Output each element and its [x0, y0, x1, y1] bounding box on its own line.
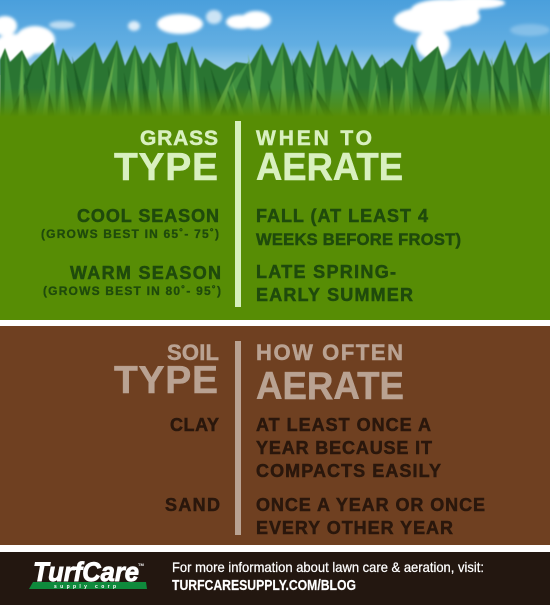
soil frequency text: YEAR BECAUSE IT — [256, 438, 432, 458]
grass timing text: LATE SPRING- — [256, 262, 396, 282]
heading: when to aerate — [256, 127, 403, 189]
soil labels: CLAY — [170, 415, 219, 435]
white gap above footer — [0, 545, 550, 552]
soil frequency text: EVERY OTHER YEAR — [256, 518, 453, 538]
footer call to action: For more information about lawn care & aeration, visit: — [172, 559, 484, 575]
soil labels: SAND — [165, 495, 220, 515]
logo: TurfCare: TM — [138, 562, 144, 567]
soil frequency text: COMPACTS EASILY — [256, 461, 441, 481]
soil frequency text: AT LEAST ONCE A — [256, 415, 431, 435]
panel: soil aeration — [0, 326, 550, 545]
sky and clouds — [0, 0, 550, 75]
heading: soil type — [114, 340, 219, 402]
soil frequency text: ONCE A YEAR OR ONCE — [256, 495, 485, 515]
heading: when to aerate: WHEN TO — [256, 127, 372, 150]
soil frequency text — [256, 415, 485, 538]
divider: grass panel — [235, 121, 241, 307]
heading: how often aerate: HOW OFTEN — [256, 340, 403, 365]
grass type labels: (GROWS BEST IN 80˚- 95˚) — [43, 284, 221, 298]
heading: how often aerate — [256, 340, 404, 408]
footer call to action — [172, 559, 484, 594]
divider: soil panel — [235, 341, 241, 535]
logo: TurfCare: TurfCare — [33, 557, 139, 587]
heading: grass type — [114, 127, 218, 189]
heading: grass type: TYPE — [114, 146, 218, 189]
grass timing text: WEEKS BEFORE FROST) — [256, 231, 461, 249]
footer call to action: TURFCARESUPPLY.COM/BLOG — [172, 577, 356, 594]
grass type labels — [41, 206, 221, 298]
footer — [0, 552, 550, 605]
heading: soil type: SOIL — [167, 340, 219, 365]
grass type labels: (GROWS BEST IN 65˚- 75˚) — [41, 227, 219, 241]
grass type labels: WARM SEASON — [70, 263, 221, 283]
panel: grass aeration — [0, 118, 550, 320]
heading: soil type: TYPE — [114, 359, 218, 402]
grass type labels: COOL SEASON — [77, 206, 219, 226]
soil labels — [165, 415, 220, 515]
grass timing text: EARLY SUMMER — [256, 285, 413, 305]
grass timing text: FALL (AT LEAST 4 — [256, 206, 428, 226]
heading: grass type: GRASS — [140, 127, 218, 150]
grass timing text — [256, 206, 461, 305]
heading: how often aerate: AERATE — [256, 365, 404, 408]
grass — [0, 40, 550, 120]
logo: TurfCare: supply corp — [54, 584, 116, 590]
heading: when to aerate: AERATE — [256, 146, 403, 189]
